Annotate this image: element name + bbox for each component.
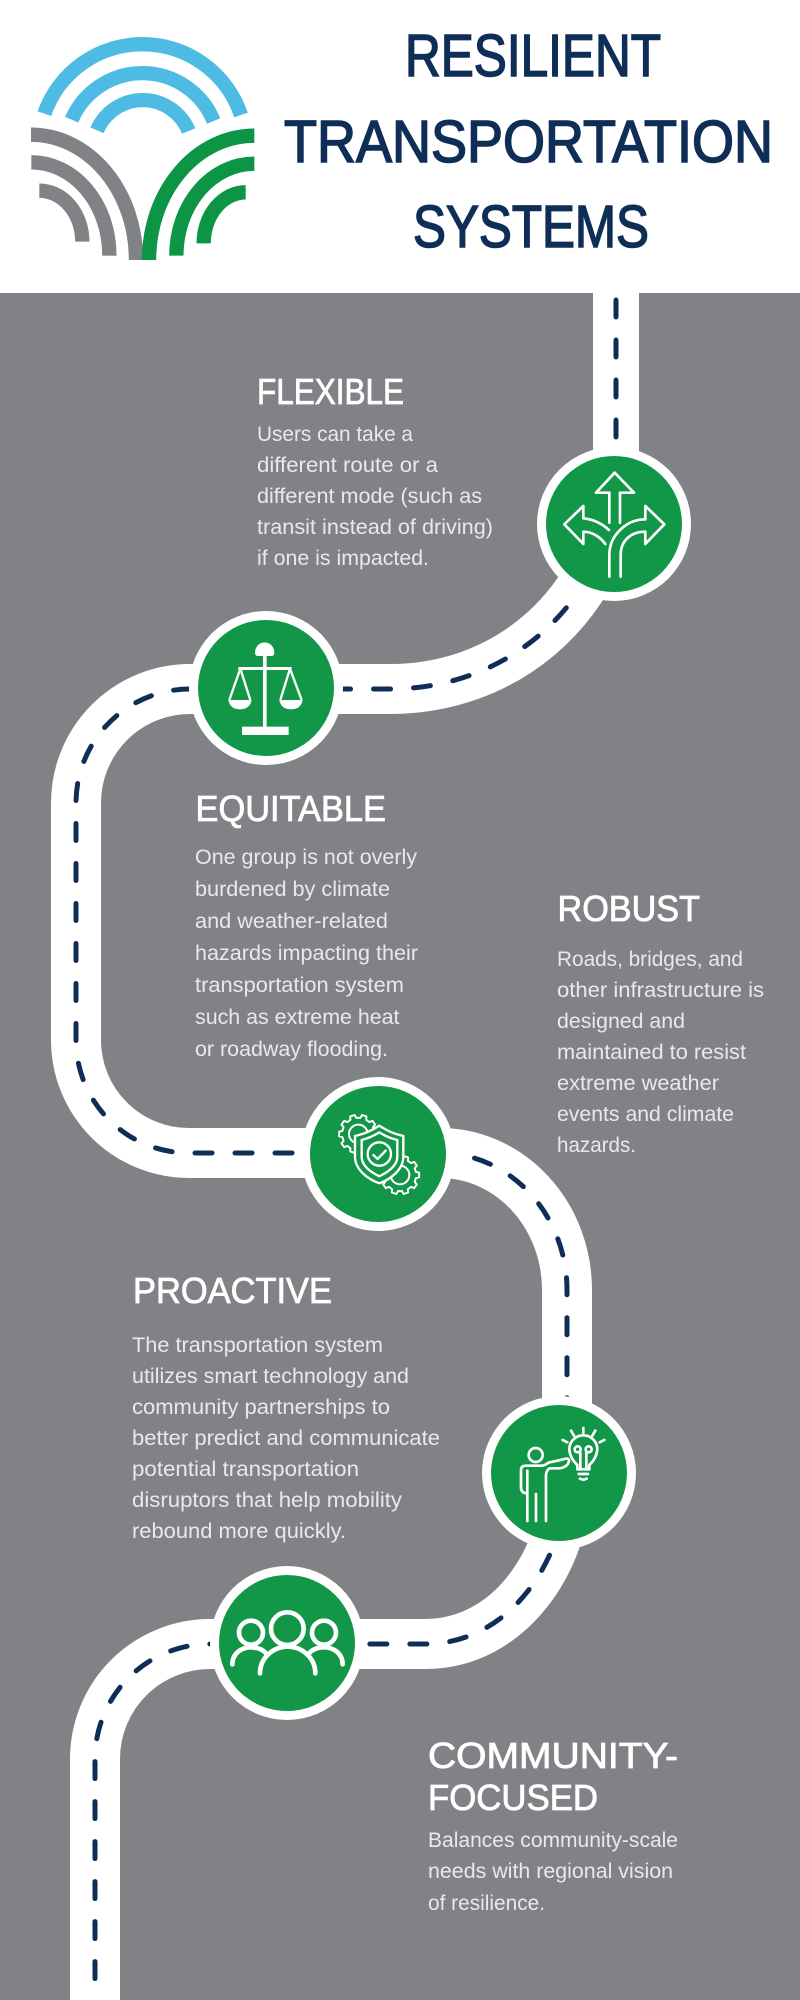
panel: community-focused: FOCUSED xyxy=(428,1777,598,1818)
panel: robust: other infrastructure is xyxy=(557,979,764,1002)
panel: equitable: EQUITABLE xyxy=(196,788,386,829)
header band xyxy=(0,0,800,293)
panel: robust: designed and xyxy=(557,1010,685,1033)
icon: group of people xyxy=(210,1566,364,1720)
panel: flexible: Users can take a xyxy=(257,423,413,446)
panel: proactive: rebound more quickly. xyxy=(132,1520,346,1543)
panel: robust: ROBUST xyxy=(558,888,700,929)
panel: robust: extreme weather xyxy=(557,1072,719,1095)
logo xyxy=(31,44,254,260)
icon: person with light bulb xyxy=(482,1396,636,1550)
panel: equitable: such as extreme heat xyxy=(195,1006,400,1029)
panel: equitable xyxy=(195,788,418,1061)
panel: proactive: utilizes smart technology and xyxy=(132,1365,409,1388)
panel: equitable: hazards impacting their xyxy=(195,942,418,965)
panel: proactive: better predict and communicate xyxy=(132,1427,440,1450)
panel: flexible xyxy=(257,371,493,570)
icon: diverging arrows xyxy=(537,447,691,601)
panel: proactive xyxy=(132,1270,440,1543)
panel: proactive: The transportation system xyxy=(132,1334,383,1357)
icon: shield and gears xyxy=(301,1077,455,1231)
panel: robust: hazards. xyxy=(557,1134,636,1157)
panel: equitable: burdened by climate xyxy=(195,878,390,901)
panel: flexible: transit instead of driving) xyxy=(257,516,493,539)
panel: community-focused: Balances community-scale xyxy=(428,1829,678,1852)
panel: proactive: potential transportation xyxy=(132,1458,359,1481)
title: RESILIENT xyxy=(405,23,661,89)
panel: proactive: disruptors that help mobility xyxy=(132,1489,403,1512)
panel: robust xyxy=(557,888,764,1157)
icon: balance scales xyxy=(189,611,343,765)
panel: robust: Roads, bridges, and xyxy=(557,948,743,971)
panel: community-focused: COMMUNITY- xyxy=(428,1735,678,1776)
panel: robust: events and climate xyxy=(557,1103,734,1126)
panel: community-focused xyxy=(428,1735,678,1915)
panel: robust: maintained to resist xyxy=(557,1041,746,1064)
panel: proactive: PROACTIVE xyxy=(133,1270,332,1311)
panel: proactive: community partnerships to xyxy=(132,1396,390,1419)
panel: equitable: and weather-related xyxy=(195,910,388,933)
title xyxy=(284,23,773,260)
panel: equitable: or roadway flooding. xyxy=(195,1038,388,1061)
panel: flexible: FLEXIBLE xyxy=(257,371,404,412)
winding road xyxy=(76,293,616,2000)
panel: community-focused: needs with regional vision xyxy=(428,1860,673,1883)
panel: community-focused: of resilience. xyxy=(428,1892,545,1915)
panel: equitable: transportation system xyxy=(195,974,404,997)
title: SYSTEMS xyxy=(413,194,649,260)
panel: flexible: different mode (such as xyxy=(257,485,482,508)
panel: equitable: One group is not overly xyxy=(195,846,418,869)
panel: flexible: different route or a xyxy=(257,454,438,477)
panel: flexible: if one is impacted. xyxy=(257,547,429,570)
